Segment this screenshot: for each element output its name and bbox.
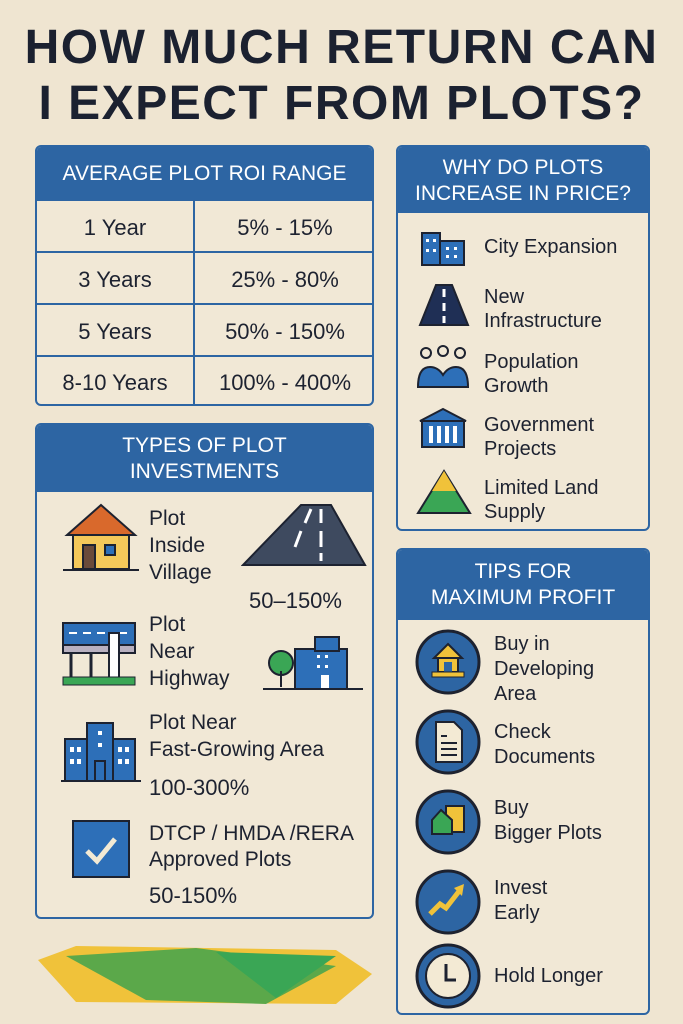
text — [494, 877, 548, 924]
table — [37, 201, 372, 404]
panel: why plots increase — [396, 145, 650, 531]
heading: tips — [398, 550, 648, 620]
icon: document circle — [416, 710, 480, 774]
text: fast growing: Fast-Growing Area — [149, 738, 324, 761]
tip: invest early — [416, 870, 548, 934]
text: Developing — [494, 658, 594, 680]
icon: tree and building — [263, 636, 363, 690]
text: fast growing: Plot Near — [149, 711, 237, 734]
text: Buy — [494, 797, 528, 819]
text: infrastructure — [484, 286, 602, 332]
text: population — [484, 351, 579, 397]
table: 25% - 80% — [231, 267, 339, 292]
table: 50% - 150% — [225, 319, 345, 344]
panel: average plot ROI range — [35, 145, 374, 406]
text: Documents — [494, 746, 595, 768]
text: land: Supply — [484, 501, 545, 523]
icon: fast growing building — [61, 722, 141, 782]
icon: road — [418, 284, 470, 326]
panel: tips — [396, 548, 650, 1015]
icon: population — [417, 345, 469, 388]
icon: road — [241, 504, 367, 566]
text: village: Village — [149, 561, 212, 584]
icon: plots circle — [416, 790, 480, 854]
text: government — [484, 414, 594, 460]
heading: why — [398, 147, 648, 213]
heading: types — [37, 425, 372, 492]
text: land: Limited Land — [484, 477, 599, 499]
text: village — [149, 507, 212, 584]
table: 1 Year — [84, 215, 146, 240]
text: Buy in — [494, 633, 550, 655]
text: infrastructure: New — [484, 286, 524, 308]
heading: types: TYPES OF PLOT — [122, 434, 287, 457]
heading: tips: MAXIMUM PROFIT — [431, 586, 615, 609]
icon: checkbox — [72, 820, 130, 878]
tip: bigger plots — [416, 790, 602, 854]
heading: ROI — [37, 147, 372, 201]
text: land — [484, 477, 599, 523]
table: 5% - 15% — [237, 215, 333, 240]
text: village: Inside — [149, 534, 205, 557]
text: highway: Plot — [149, 613, 185, 636]
title — [25, 21, 658, 130]
tip: documents — [416, 710, 595, 774]
table: 8-10 Years — [62, 370, 168, 395]
text: population: Growth — [484, 375, 548, 397]
illustration: land plots — [38, 946, 372, 1004]
text: government: Government — [484, 414, 594, 436]
text — [494, 721, 595, 768]
icon: land — [416, 469, 472, 514]
table: 5 Years — [78, 319, 152, 344]
heading: why: INCREASE IN PRICE? — [415, 182, 631, 205]
text — [494, 633, 594, 705]
text: Invest — [494, 877, 547, 899]
title: I EXPECT FROM PLOTS? — [38, 77, 645, 130]
heading: tips: TIPS FOR — [475, 560, 571, 583]
icon: city — [421, 232, 465, 266]
heading: why: WHY DO PLOTS — [443, 156, 603, 179]
text: fast growing — [149, 711, 324, 761]
text: Area — [494, 683, 536, 705]
text — [494, 797, 602, 844]
text: Early — [494, 902, 540, 924]
table: 100% - 400% — [219, 370, 351, 395]
text: Hold Longer — [494, 965, 603, 987]
heading: types: INVESTMENTS — [130, 460, 279, 483]
title: HOW MUCH RETURN CAN — [25, 21, 658, 74]
heading: ROI: AVERAGE PLOT ROI RANGE — [63, 162, 346, 185]
text: city: City Expansion — [484, 236, 617, 258]
text: Check — [494, 721, 551, 743]
text: government: Projects — [484, 438, 556, 460]
text: 50-150: 50-150% — [149, 883, 237, 908]
icon: government — [420, 408, 466, 448]
panel: types of plot investments — [35, 423, 374, 919]
tip: hold longer — [416, 944, 603, 1008]
text: 100-300: 100-300% — [149, 775, 249, 800]
text: approved: Approved Plots — [149, 848, 291, 871]
icon: arrow circle — [416, 870, 480, 934]
text: population: Population — [484, 351, 579, 373]
text: highway: Near — [149, 640, 195, 663]
text: approved — [149, 822, 354, 871]
icon: clock circle — [416, 944, 480, 1008]
text: approved: DTCP / HMDA /RERA — [149, 822, 354, 845]
icon: house — [63, 504, 139, 571]
icon: house circle — [416, 630, 480, 694]
text: Bigger Plots — [494, 822, 602, 844]
text: highway: Highway — [149, 667, 230, 690]
text: infrastructure: Infrastructure — [484, 310, 602, 332]
table: 3 Years — [78, 267, 152, 292]
tip: developing area — [416, 630, 594, 705]
icon: highway building — [62, 622, 136, 686]
text: highway — [149, 613, 230, 690]
text: 50-150: 50–150% — [249, 588, 342, 613]
text: village: Plot — [149, 507, 185, 530]
